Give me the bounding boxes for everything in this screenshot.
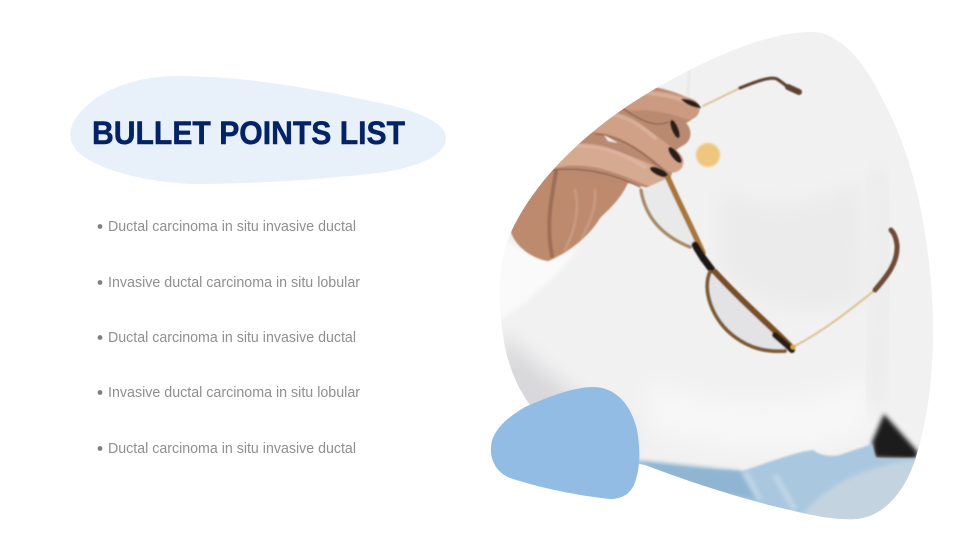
title background blob: [70, 76, 446, 184]
hand: [505, 86, 700, 261]
bullet item 5: Ductal carcinoma in situ invasive ductal: [108, 440, 356, 457]
jeans: [639, 444, 916, 520]
pendant: [696, 143, 720, 167]
glasses: [641, 78, 897, 351]
middle finger: [596, 122, 673, 162]
finger highlights and creases: [575, 93, 685, 167]
dark belt shadow: [872, 414, 918, 460]
bullet item 3: Ductal carcinoma in situ invasive ductal: [108, 329, 356, 346]
title: BULLET POINTS LIST: [92, 115, 405, 151]
photo: hand holding glasses in blob mask: [490, 25, 940, 530]
bullet item 1: Ductal carcinoma in situ invasive ductal: [108, 218, 356, 235]
hand silhouette: [511, 87, 701, 232]
palm shading: [511, 172, 627, 261]
white sweater: [501, 32, 933, 470]
bullet item 2: Invasive ductal carcinoma in situ lobular: [108, 274, 360, 291]
slide canvas: [70, 32, 933, 520]
bullet item 4: Invasive ductal carcinoma in situ lobular: [108, 384, 360, 401]
top finger: [632, 100, 689, 109]
nails: [649, 99, 701, 179]
bullet list: [98, 218, 360, 457]
lower finger: [552, 155, 656, 178]
blue accent blob: [491, 387, 639, 499]
